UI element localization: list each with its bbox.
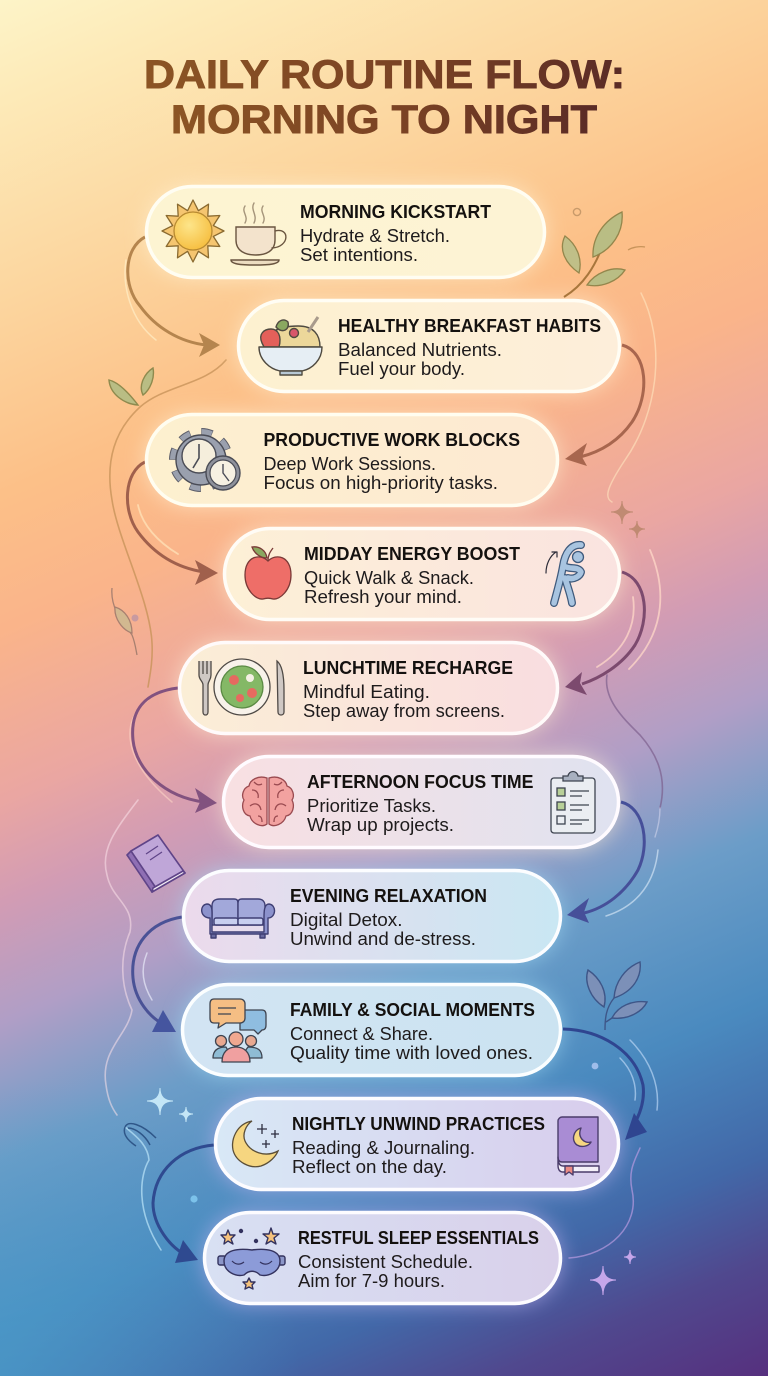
icon: checklist clipboard [551, 772, 595, 833]
arrow 1: morning to breakfast [128, 237, 220, 357]
text: morning kickstart: Hydrate & Stretch. [300, 226, 450, 246]
panel: family and social [182, 984, 560, 1076]
decorative thin curves [105, 260, 662, 1258]
leaf sprig: blue right [587, 962, 647, 1030]
glow behind blue panels [181, 869, 562, 1077]
text: family and social: Quality time with loved ones. [290, 1043, 533, 1063]
text: evening relaxation: EVENING RELAXATION [290, 886, 487, 906]
panel: morning kickstart [146, 186, 544, 278]
text: evening relaxation: Digital Detox. [290, 910, 402, 930]
sparkles: violet bottom right [590, 1250, 636, 1295]
icon: stretching figure [546, 545, 584, 603]
text: nightly unwind: NIGHTLY UNWIND PRACTICES [292, 1114, 545, 1134]
glow behind violet panels [203, 1097, 620, 1305]
panel: evening relaxation [184, 870, 560, 962]
text: lunchtime recharge [303, 658, 513, 721]
arrow 2: breakfast to work [565, 345, 644, 466]
arrow 9: nightly to sleep [153, 1145, 214, 1263]
icon: sofa [202, 899, 275, 938]
dot: top right ring [573, 208, 581, 216]
text: healthy breakfast: Fuel your body. [338, 359, 465, 379]
title: MORNING TO NIGHT [171, 98, 597, 142]
text: afternoon focus: AFTERNOON FOCUS TIME [307, 772, 534, 792]
title: DAILY ROUTINE FLOW: [144, 53, 625, 97]
text: restful sleep: Aim for 7-9 hours. [298, 1271, 445, 1291]
glow behind warm panels [145, 185, 621, 849]
text: morning kickstart: MORNING KICKSTART [300, 202, 491, 222]
text: nightly unwind: Reading & Journaling. [292, 1138, 475, 1158]
text: lunchtime recharge: Mindful Eating. [303, 682, 430, 702]
text: afternoon focus [307, 772, 534, 835]
text: family and social [290, 1000, 535, 1063]
text: healthy breakfast: Balanced Nutrients. [338, 340, 502, 360]
arrow 7: evening to family [133, 917, 182, 1032]
panel: restful sleep [204, 1212, 560, 1304]
icon: chat and people [210, 999, 266, 1062]
text: nightly unwind: Reflect on the day. [292, 1157, 447, 1177]
text: lunchtime recharge: Step away from screens. [303, 701, 505, 721]
panel: nightly unwind [216, 1098, 618, 1190]
text: family and social: Connect & Share. [290, 1024, 433, 1044]
text: afternoon focus: Prioritize Tasks. [307, 796, 436, 816]
text: midday energy: Refresh your mind. [304, 587, 462, 607]
text: productive work [264, 430, 520, 493]
icon: salad plate with cutlery [199, 659, 284, 715]
panel: lunchtime recharge [180, 642, 558, 734]
icon: moon book [558, 1117, 599, 1175]
panel: healthy breakfast [238, 300, 620, 392]
arrow 8: family to nightly [563, 1029, 647, 1140]
text: healthy breakfast [338, 316, 601, 379]
icon: sun [162, 200, 224, 262]
icon: feather lines [124, 1124, 156, 1146]
icon: breakfast bowl [259, 317, 322, 375]
arrow 4: midday to lunch [565, 572, 644, 695]
dots [190, 1063, 598, 1203]
text: productive work: Focus on high-priority tasks. [264, 473, 498, 493]
text: midday energy: MIDDAY ENERGY BOOST [304, 544, 520, 564]
icon: sleep mask and stars [218, 1228, 285, 1289]
text: productive work: PRODUCTIVE WORK BLOCKS [264, 430, 520, 450]
leaf sprig: top right [562, 212, 645, 297]
text: family and social: FAMILY & SOCIAL MOMENTS [290, 1000, 535, 1020]
icon: crescent moon and stars [233, 1121, 279, 1167]
panel: productive work [146, 414, 558, 506]
text: evening relaxation [290, 886, 487, 949]
sparkles: top right [611, 501, 645, 538]
icon: purple book, left [127, 835, 185, 892]
text: evening relaxation: Unwind and de-stress. [290, 929, 476, 949]
leaf sprig: faded left [112, 588, 138, 655]
arrow 6: afternoon to evening [567, 802, 644, 923]
panel: midday energy [224, 528, 620, 620]
arrow 3: work to midday [127, 462, 218, 585]
icon: apple [245, 547, 291, 599]
text: nightly unwind [292, 1114, 545, 1177]
text: restful sleep [298, 1228, 539, 1291]
icon: brain [243, 777, 293, 826]
icon: gear with clocks [173, 432, 240, 490]
text: productive work: Deep Work Sessions. [264, 454, 436, 474]
text: afternoon focus: Wrap up projects. [307, 815, 454, 835]
text: restful sleep: Consistent Schedule. [298, 1252, 473, 1272]
icon: steaming cup [231, 203, 286, 265]
title [144, 53, 625, 142]
text: midday energy: Quick Walk & Snack. [304, 568, 474, 588]
panel: afternoon focus [224, 756, 618, 848]
leaf sprig: left [109, 368, 153, 405]
text: restful sleep: RESTFUL SLEEP ESSENTIALS [298, 1228, 539, 1248]
arrow 5: lunch to afternoon [133, 688, 217, 813]
text: morning kickstart [300, 202, 491, 265]
text: lunchtime recharge: LUNCHTIME RECHARGE [303, 658, 513, 678]
text: midday energy [304, 544, 520, 607]
text: healthy breakfast: HEALTHY BREAKFAST HABITS [338, 316, 601, 336]
text: morning kickstart: Set intentions. [300, 245, 418, 265]
sparkles: blue left [147, 1088, 193, 1122]
